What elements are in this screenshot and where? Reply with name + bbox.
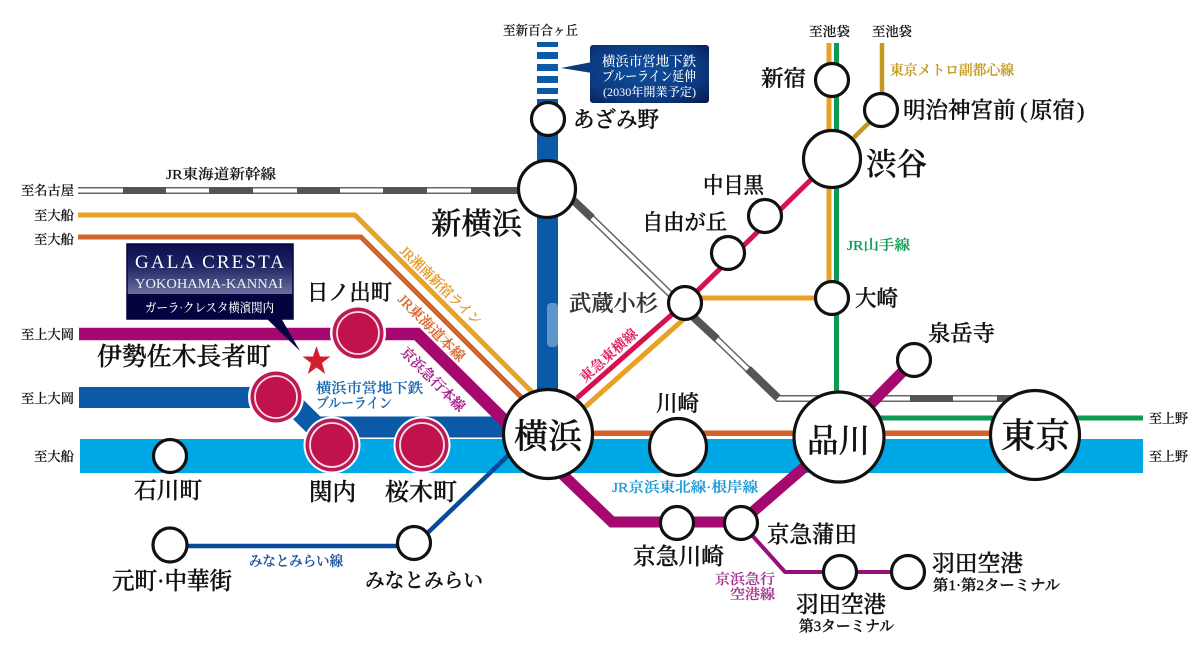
station names: 品川 [807, 424, 870, 460]
line: JR Shonan-Shinjuku [78, 215, 532, 392]
line names: みなとみらい線 [249, 554, 343, 570]
station names: 関内 [309, 479, 356, 506]
icon: property star [302, 346, 330, 374]
station names: 川崎 [656, 391, 699, 416]
station names: 東京 [1001, 417, 1070, 456]
callout: Blue Line extension: 横浜市営地下鉄 [602, 53, 696, 69]
line: Tokaido Shinkansen west [78, 187, 523, 194]
callout: Gala Cresta property: YOKOHAMA-KANNAI [135, 277, 283, 292]
terminus labels: 至上野 [1149, 411, 1188, 426]
station names: 大崎 [855, 286, 898, 311]
line names: 京浜急行本線 [397, 344, 469, 415]
line: JR Yamanote [836, 43, 1143, 418]
terminus labels: 至池袋 [809, 24, 850, 39]
station names: 第1·第2ターミナル [933, 577, 1060, 594]
line: Tokyu Toyoko [577, 159, 832, 398]
terminus labels: 至大船 [34, 449, 74, 464]
station names: あざみ野 [573, 107, 659, 132]
station names: ) [1077, 98, 1084, 123]
station names: 新横浜 [431, 208, 523, 241]
stations: ordinary [153, 64, 1080, 588]
station: Hinodecho [330, 305, 386, 361]
station: Isezakichojamachi [248, 369, 304, 425]
station: Sakuragicho [394, 416, 450, 474]
station names: 羽田空港 [796, 592, 886, 617]
line: Blue Line west [79, 398, 515, 427]
station names: 明治神宮前 [903, 98, 1016, 123]
terminus labels: 至名古屋 [21, 183, 74, 198]
station names: 横浜 [514, 418, 583, 456]
line: JR Shonan-Shinjuku east [585, 43, 829, 407]
line names: 横浜市営地下鉄 [316, 380, 423, 397]
station names: 原宿 [1030, 98, 1075, 123]
callout: Blue Line extension: ブルーライン延伸 [602, 68, 696, 84]
line: JR Keihin-Tohoku / Negishi band [80, 439, 1143, 473]
station names: 元町·中華街 [112, 568, 232, 595]
terminus labels: 至大船 [34, 232, 74, 247]
terminus labels: 至新百合ヶ丘 [503, 23, 578, 38]
callout: Gala Cresta property: GALA CRESTA [135, 252, 284, 273]
callout: Blue Line extension: (2030年開業予定) [603, 84, 696, 99]
line names: 京浜急行 [715, 571, 775, 588]
line: JR Tokaido Main [78, 237, 530, 406]
line: Tokaido Shinkansen east [570, 197, 1020, 402]
station names: 京急蒲田 [767, 522, 857, 547]
line: Keikyu Main west [79, 334, 512, 428]
terminus labels: 至大船 [34, 208, 74, 223]
line: Tokyo Metro Fukutoshin [832, 43, 882, 159]
terminus labels: 至上大岡 [21, 391, 74, 406]
station names: 武蔵小杉 [569, 291, 658, 316]
line names: 東京メトロ副都心線 [890, 62, 1014, 79]
terminus labels [21, 23, 1188, 464]
terminus labels: 至上野 [1149, 449, 1188, 464]
line: Minatomirai [170, 444, 520, 546]
line: Keikyu Main east [560, 438, 838, 522]
station: Kannai [304, 416, 360, 474]
callout: Gala Cresta property: ガーラ·クレスタ横濱関内 [145, 300, 274, 315]
station names: 日ノ出町 [307, 280, 392, 305]
station names [97, 66, 1084, 635]
station names: 自由が丘 [642, 210, 727, 235]
line: Blue Line extension dashes [537, 42, 558, 105]
line names: 東急東横線 [576, 325, 641, 386]
station names: 伊勢佐木長者町 [97, 343, 271, 371]
station names: 羽田空港 [932, 551, 1023, 576]
line names: JR湘南新宿ライン [396, 243, 485, 329]
line names: JR京浜東北線·根岸線 [612, 479, 758, 496]
line: JR Tokaido east [548, 430, 1038, 436]
station names: 桜木町 [385, 479, 457, 506]
station names: 新宿 [761, 66, 806, 91]
station names: 泉岳寺 [928, 321, 995, 346]
station names: 第3ターミナル [799, 618, 894, 635]
station names: 石川町 [134, 478, 202, 503]
watermark fragment [547, 303, 558, 347]
callout: Gala Cresta property [127, 244, 300, 351]
callout: Blue Line extension [561, 45, 709, 103]
line names: 空港線 [730, 586, 775, 603]
line: Blue Line vertical [537, 105, 558, 395]
terminus labels: 至上大岡 [21, 327, 74, 342]
terminus labels: 至池袋 [872, 24, 912, 39]
station names: ( [1020, 98, 1028, 123]
line names: JR山手線 [847, 237, 910, 254]
station names: 京急川崎 [633, 544, 724, 569]
station names: 渋谷 [866, 147, 927, 182]
line names: JR東海道新幹線 [166, 166, 276, 183]
line names: JR東海道本線 [394, 291, 468, 365]
line: Keikyu Airport [741, 523, 908, 572]
line names [166, 62, 1014, 603]
line names: ブルーライン [316, 396, 392, 412]
station names: 中目黒 [703, 173, 765, 198]
line: Keikyu to Sengakuji [860, 360, 914, 415]
station names: みなとみらい [365, 570, 483, 592]
